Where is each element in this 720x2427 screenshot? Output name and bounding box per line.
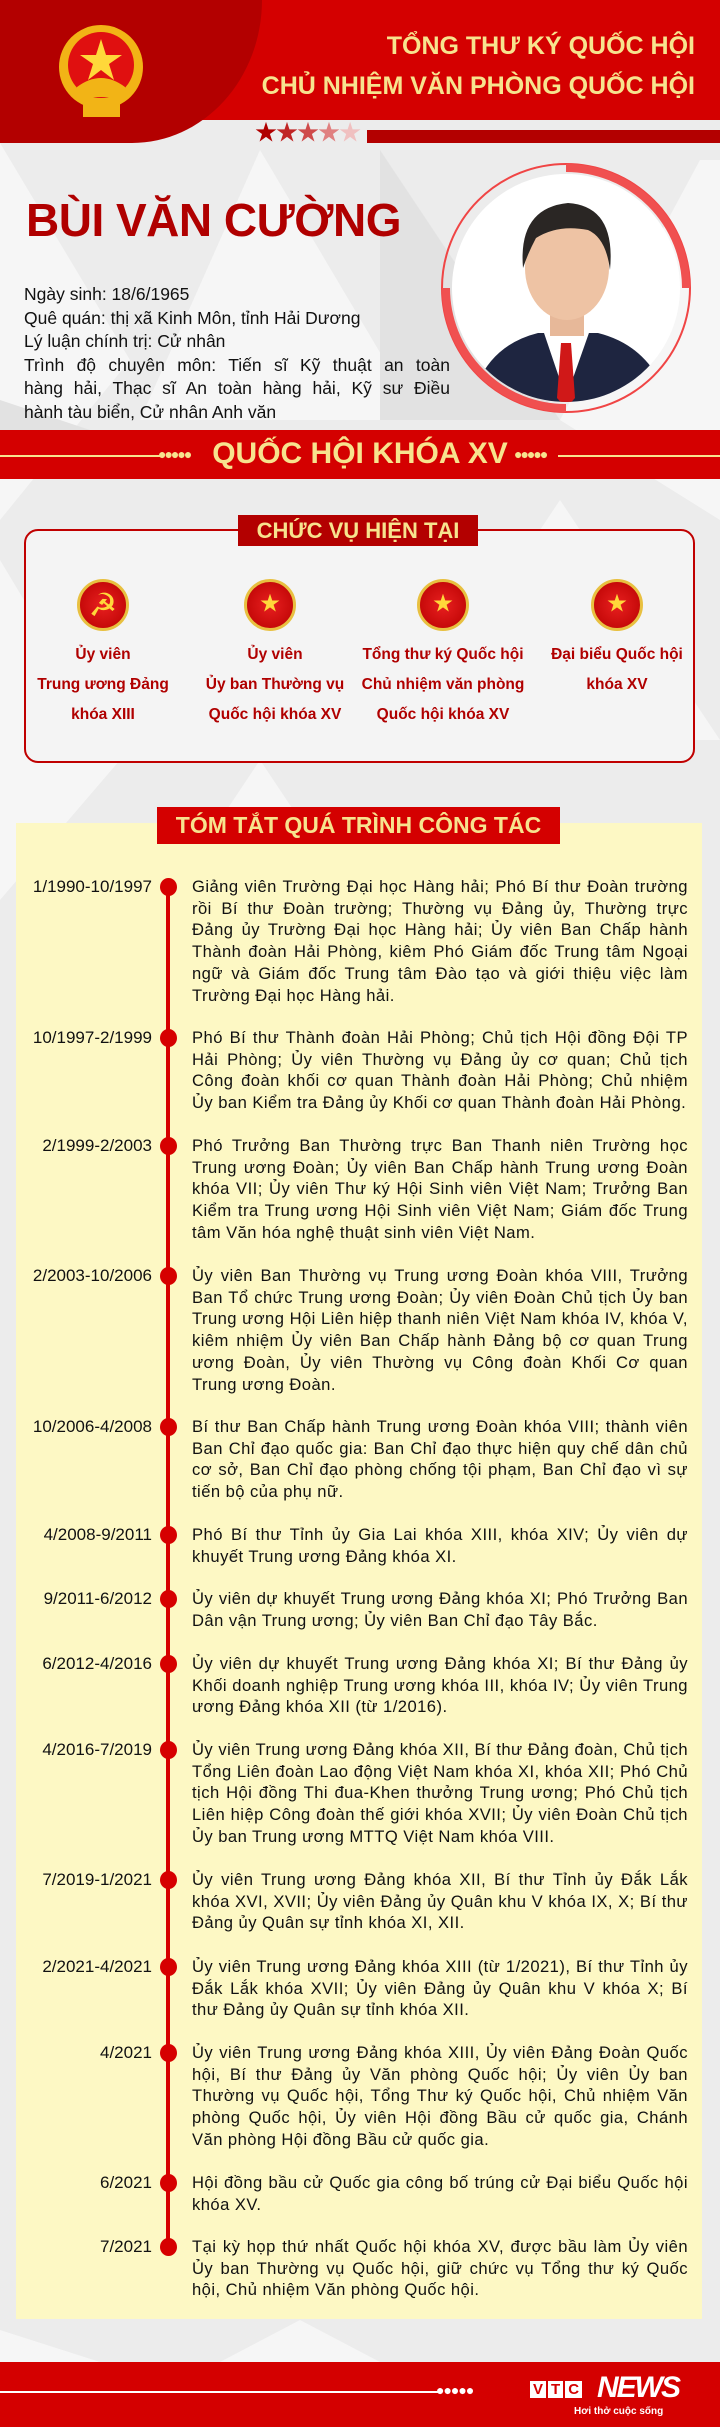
timeline entries: Hội đồng bầu cử Quốc gia công bố trúng cử Đại biểu Quốc hội khóa XV.: [192, 2173, 688, 2214]
timeline entries: Ủy viên dự khuyết Trung ương Đảng khóa XI; Bí thư Đảng ủy Khối doanh nghiệp Trung ương khóa III, khóa IV; Ủy viên Trung ương Đảng khóa XII (từ 1/2016).: [192, 1654, 688, 1716]
footer: ●●●●●: [436, 2382, 473, 2398]
banner: Quốc hội khóa XV: [0, 430, 720, 479]
logo: VTC News: [530, 2371, 681, 2417]
footer: [0, 2362, 720, 2427]
position 2: Ủy viên: [247, 646, 303, 663]
text block: personal info: [24, 284, 450, 422]
title: CHỦ NHIỆM VĂN PHÒNG QUỐC HỘI: [262, 72, 695, 100]
timeline entries: 4/2016-7/2019: [42, 1740, 152, 1759]
heading: timeline: [157, 807, 560, 844]
position 4: khóa XV: [586, 676, 648, 693]
icon: emblem 3: [591, 579, 643, 631]
icon: emblem 3: ★: [607, 593, 627, 615]
position 3: [362, 646, 524, 723]
timeline entries: Ủy viên Trung ương Đảng khóa XIII, Ủy viên Đảng Đoàn Quốc hội, Bí thư Đảng ủy Văn phòng Quốc hội; Ủy viên Ủy ban Thường vụ Quốc hội, Tổng Thư ký Quốc hội, Chủ nhiệm Văn phòng Quốc hội, Ủy viên Hội đồng Bầu cử quốc gia, Chánh Văn phòng Hội đồng Bầu cử quốc gia.: [192, 2043, 688, 2149]
stars and bar: [255, 120, 720, 145]
timeline entries: 10/2006-4/2008: [33, 1417, 152, 1436]
position 3: Quốc hội khóa XV: [377, 706, 509, 723]
timeline entries: Ủy viên dự khuyết Trung ương Đảng khóa XI; Phó Trưởng Ban Dân vận Trung ương; Ủy viên Ban Chỉ đạo Tây Bắc.: [192, 1589, 688, 1630]
title: [262, 31, 695, 100]
icon: emblem 2: ★: [433, 593, 453, 615]
timeline entries: Ủy viên Trung ương Đảng khóa XIII (từ 1/2021), Bí thư Tỉnh ủy Đắk Lắk khóa XVII; Ủy viên Đảng ủy Quân khu V khóa X; Bí thư Đảng ủy Quân sự tỉnh khóa XII.: [192, 1957, 688, 2019]
timeline entries: Ủy viên Ban Thường vụ Trung ương Đoàn khóa VIII, Trưởng Ban Tổ chức Trung ương Đoàn; Ủy viên Đoàn Chủ tịch Ủy ban Trung ương Hội Liên hiệp thanh niên Việt Nam khóa IV, khóa V, kiêm nhiệm Ủy viên Ban Chấp hành Đảng bộ cơ quan Trung ương Đoàn, Ủy viên Thường vụ Công đoàn Khối Cơ quan Trung ương Đoàn.: [192, 1266, 688, 1394]
timeline entries: 4/2008-9/2011: [44, 1525, 152, 1544]
title: TỔNG THƯ KÝ QUỐC HỘI: [387, 32, 695, 60]
timeline entries: Tại kỳ họp thứ nhất Quốc hội khóa XV, được bầu làm Ủy viên Ủy ban Thường vụ Quốc hội, giữ chức vụ Tổng thư ký Quốc hội, Chủ nhiệm Văn phòng Quốc hội.: [192, 2237, 688, 2299]
timeline entries: Phó Bí thư Tỉnh ủy Gia Lai khóa XIII, khóa XIV; Ủy viên dự khuyết Trung ương Đảng khóa XI.: [192, 1525, 688, 1566]
timeline entries: 2/2003-10/2006: [33, 1266, 152, 1285]
banner: Quốc hội khóa XV: QUỐC HỘI KHÓA XV: [212, 437, 508, 470]
icon: party: [77, 579, 129, 631]
heading: Chức vụ hiện tại: [238, 515, 478, 546]
position 2: Quốc hội khóa XV: [209, 706, 341, 723]
timeline entries: 2/2021-4/2021: [42, 1957, 152, 1976]
timeline entries: Bí thư Ban Chấp hành Trung ương Đoàn khóa VIII; thành viên Ban Chỉ đạo quốc gia: Ban Chỉ đạo thực hiện quy chế dân chủ cơ sở, Ban Chỉ đạo phòng chống tội phạm, Ban Chỉ đạo vì sự tiến bộ của phụ nữ.: [192, 1417, 688, 1501]
logo: VTC News: Hơi thở cuộc sống: [574, 2406, 663, 2417]
text block: personal info: hàng hải, Thạc sĩ An toàn hàng hải, Kỹ sư Điều: [24, 378, 450, 398]
timeline entries: 2/1999-2/2003: [42, 1136, 152, 1155]
icon: national emblem: [59, 25, 143, 117]
banner: Quốc hội khóa XV: ●●●●●: [158, 446, 190, 462]
timeline entries: 10/1997-2/1999: [33, 1028, 152, 1047]
text block: personal info: hành tàu biển, Cử nhân Anh văn: [24, 402, 276, 422]
logo: VTC News: NEWS: [597, 2371, 679, 2404]
timeline entries: 6/2012-4/2016: [42, 1654, 152, 1673]
icon: emblem 2: [417, 579, 469, 631]
icon: party: ☭: [89, 587, 117, 623]
panel: timeline: [16, 823, 702, 2319]
position 1: Ủy viên: [75, 646, 131, 663]
portrait photo: [441, 163, 691, 413]
icon: emblem 1: [244, 579, 296, 631]
header: [0, 0, 720, 143]
position 2: [206, 644, 344, 723]
position 4: [551, 646, 683, 693]
timeline entries: 1/1990-10/1997: [33, 877, 152, 896]
logo: VTC News: V T C: [533, 2381, 579, 2398]
banner: Quốc hội khóa XV: ●●●●●: [514, 446, 546, 462]
timeline entries: 7/2019-1/2021: [42, 1870, 152, 1889]
text block: personal info: Trình độ chuyên môn: Tiến sĩ Kỹ thuật an toàn: [24, 354, 450, 374]
text block: personal info: Quê quán: thị xã Kinh Môn, tỉnh Hải Dương: [24, 308, 360, 328]
timeline entries: Ủy viên Trung ương Đảng khóa XII, Bí thư Đảng đoàn, Chủ tịch Tổng Liên đoàn Lao động Việt Nam khóa XI, khóa XII; Phó Chủ tịch Hội đồng Thi đua-Khen thưởng Trung ương; Phó Chủ tịch Liên hiệp Công đoàn thế giới khóa XVII; Ủy viên Đoàn Chủ tịch Ủy ban Trung ương MTTQ Việt Nam khóa VIII.: [192, 1740, 688, 1846]
position 1: Trung ương Đảng: [37, 676, 169, 693]
timeline entries: 4/2021: [100, 2043, 152, 2062]
timeline line: [166, 887, 170, 2247]
icon: emblem 1: ★: [260, 593, 280, 615]
timeline entries: 6/2021: [100, 2173, 152, 2192]
timeline entries: Ủy viên Trung ương Đảng khóa XII, Bí thư Tỉnh ủy Đắk Lắk khóa XVI, XVII; Ủy viên Đảng ủy Quân khu V khóa IX, X; Bí thư Đảng ủy Quân sự tỉnh khóa XI, XII.: [192, 1870, 688, 1932]
name: BÙI VĂN CƯỜNG: [26, 194, 401, 246]
position 3: Chủ nhiệm văn phòng: [362, 676, 524, 693]
timeline entries: Phó Trưởng Ban Thường trực Ban Thanh niên Trường học Trung ương Đoàn; Ủy viên Ban Chấp hành Trung ương Đoàn khóa VII; Ủy viên Thư ký Hội Sinh viên Việt Nam; Trưởng Ban Kiểm tra Trung ương Hội Sinh viên Việt Nam; Giám đốc Trung tâm Văn hóa nghệ thuật sinh viên Việt Nam.: [192, 1136, 688, 1242]
text block: personal info: Ngày sinh: 18/6/1965: [24, 284, 189, 304]
position 1: khóa XIII: [71, 706, 135, 723]
text block: personal info: Lý luận chính trị: Cử nhân: [24, 331, 225, 351]
position 3: Tổng thư ký Quốc hội: [362, 646, 524, 663]
position 2: Ủy ban Thường vụ: [206, 676, 344, 693]
position 1: [37, 644, 169, 723]
stars and bar: ★★★★★: [255, 120, 360, 145]
heading: timeline: TÓM TẮT QUÁ TRÌNH CÔNG TÁC: [176, 812, 541, 838]
timeline entries: Giảng viên Trường Đại học Hàng hải; Phó Bí thư Đoàn trường rồi Bí thư Đoàn trường; Thường vụ Đảng ủy, Thường trực Đảng ủy Trường Đại học Hàng hải; Ủy viên Ban Chấp hành Thành đoàn Hải Phòng, kiêm Phó Giám đốc Trung tâm Ngoại ngữ và Giám đốc Trung tâm Đào tạo và giới thiệu việc làm Trường Đại học Hàng hải.: [192, 877, 688, 1005]
timeline entries: 7/2021: [100, 2237, 152, 2256]
position 4: Đại biểu Quốc hội: [551, 646, 683, 663]
heading: Chức vụ hiện tại: CHỨC VỤ HIỆN TẠI: [257, 518, 459, 543]
timeline entries: Phó Bí thư Thành đoàn Hải Phòng; Chủ tịch Hội đồng Đội TP Hải Phòng; Ủy viên Thường vụ Đảng ủy cơ quan; Chủ tịch Công đoàn khối cơ quan Thành đoàn Hải Phòng; Chủ nhiệm Ủy ban Kiểm tra Đảng ủy Khối cơ quan Thành đoàn Hải Phòng.: [192, 1028, 688, 1112]
panel: current positions: [24, 529, 695, 763]
timeline entries: 9/2011-6/2012: [44, 1589, 152, 1608]
